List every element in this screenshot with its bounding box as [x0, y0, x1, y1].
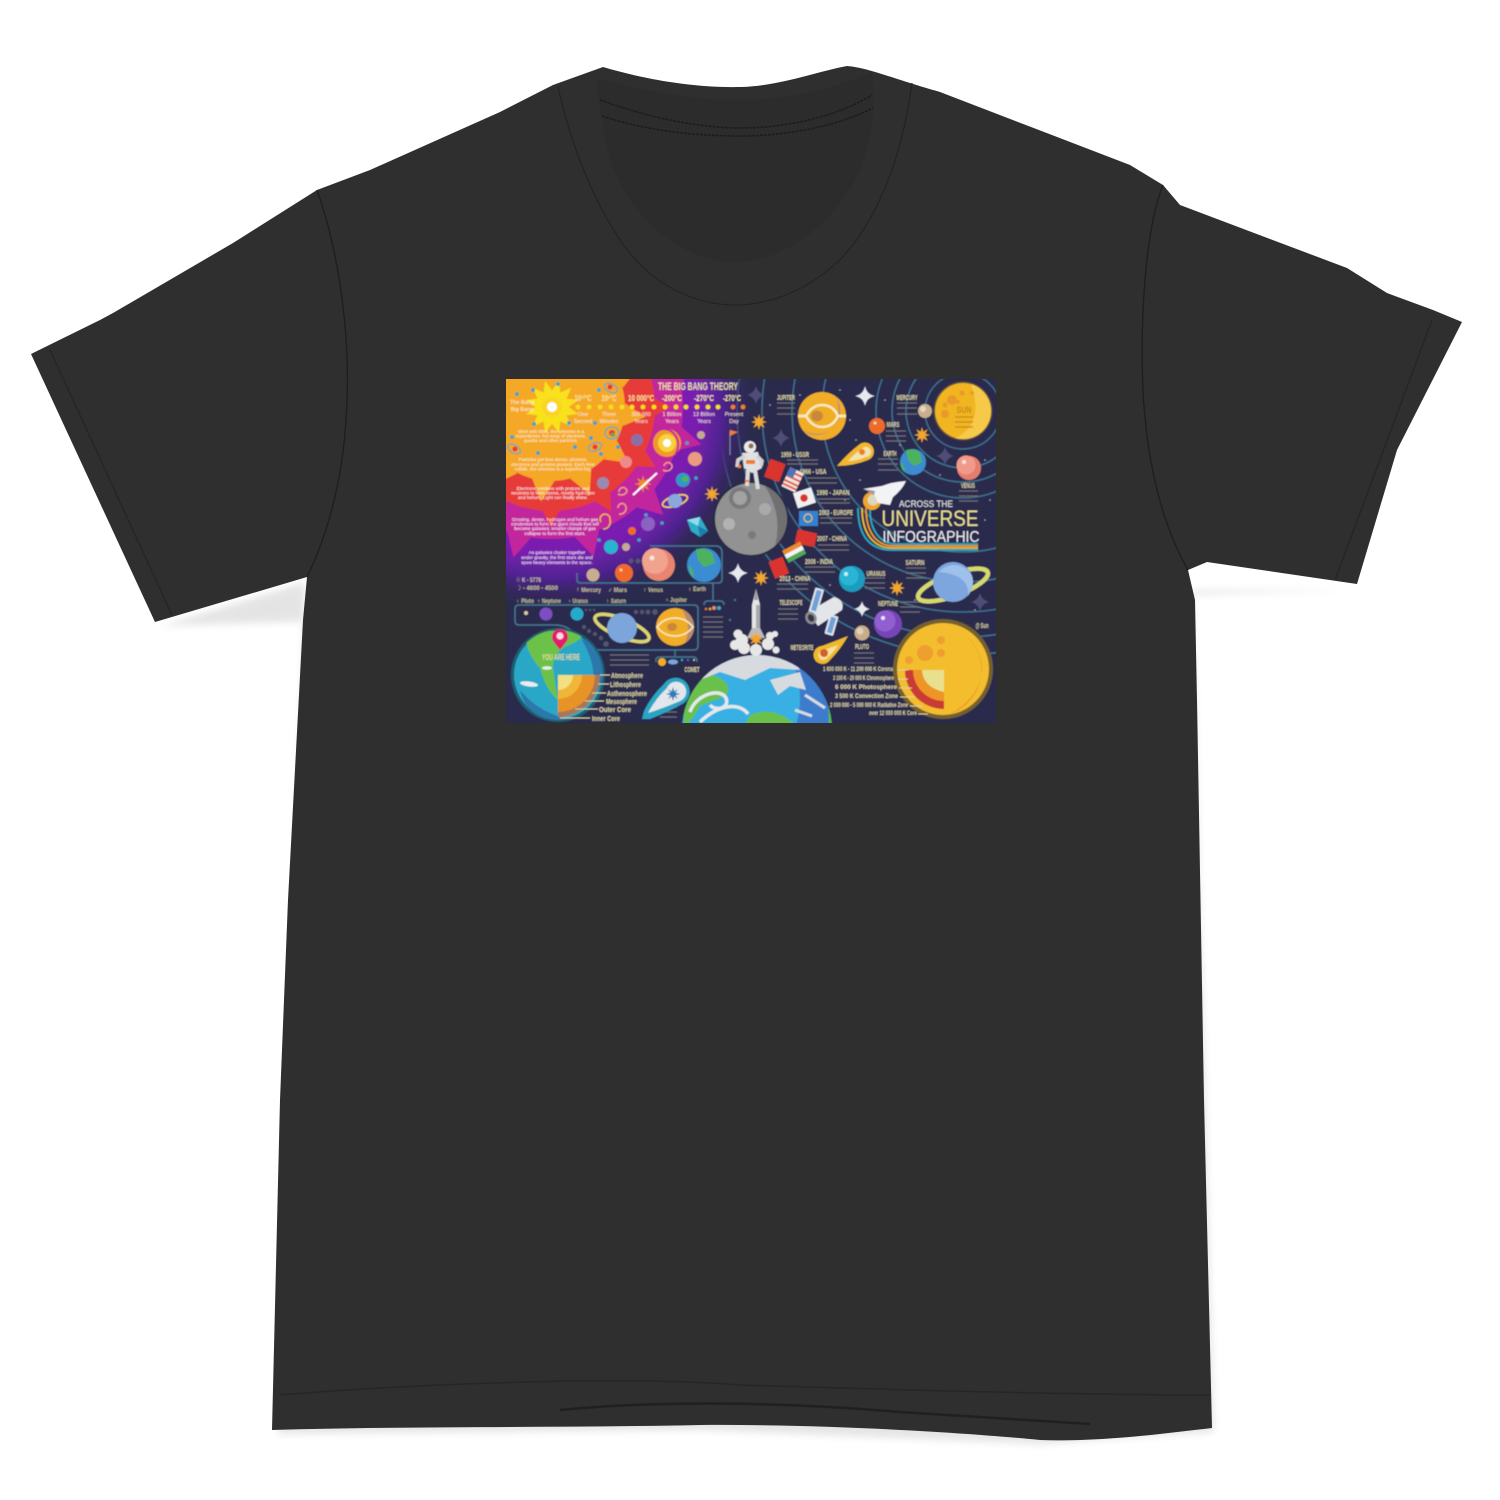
big bang temperature timeline: Years	[697, 419, 711, 425]
big bang temperature timeline: Years	[634, 419, 648, 425]
planet symbol legend: ♂ Mars	[608, 587, 627, 594]
supernova with jet	[633, 473, 657, 495]
ringed planet small	[661, 492, 689, 510]
space agency flags	[764, 459, 818, 579]
spiral galaxy	[653, 429, 681, 457]
sun layers temperature labels: 3 100 K - 20 000 K Chromosphere	[833, 676, 894, 682]
sun layers temperature labels: 6 000 K Photosphere	[835, 685, 898, 691]
earth layer labels	[592, 673, 647, 723]
title swoosh lines	[858, 508, 978, 550]
earth at bottom	[682, 654, 832, 723]
location pin	[552, 629, 568, 650]
printed infographic	[506, 379, 996, 723]
paragraph: galaxies cluster: As galaxies cluster together	[529, 550, 586, 555]
planet name labels	[777, 395, 988, 652]
jupiter	[798, 392, 846, 440]
big bang temperature timeline: One	[578, 412, 588, 418]
paragraph: first stars: Growing, dense, hydrogen and helium gas	[512, 517, 599, 522]
paragraph: hot soup: Most with titles, the universe is a	[518, 429, 585, 434]
title line: universe: UNIVERSE	[882, 506, 978, 531]
planet name labels: MARS	[886, 422, 900, 429]
paragraph: atoms form: neutrons to form atoms, mostly hydrogen	[511, 491, 595, 496]
particles in the early universe	[510, 382, 620, 456]
planet symbol legend: ♄ Saturn	[606, 598, 626, 605]
sun layers temperature labels: 2 000 000 - 5 000 000 K Radiative Zone	[830, 703, 908, 709]
paragraph: first stars: become galaxies; smaller clumps of gas	[514, 526, 596, 531]
big bang temperature timeline	[574, 394, 745, 425]
placeholder text lines	[610, 403, 978, 717]
sun layers wedge	[898, 670, 944, 714]
paragraph: protons and neutrons: Particles get less dense, photons,	[519, 457, 587, 462]
space shuttle	[863, 481, 906, 510]
big bang temperature timeline: Present	[725, 412, 744, 418]
agency timeline labels: 1959 - USSR	[781, 452, 809, 459]
paragraph: atoms form: Electrons combine with protons and	[517, 486, 590, 491]
saturn	[914, 562, 992, 608]
sun layers temperature labels: 1 600 000 K - 11 200 000 K Corona	[823, 667, 893, 673]
sun layers temperature labels	[823, 667, 917, 717]
planet symbol legend: ♁ Earth	[688, 586, 706, 593]
large sun cutaway	[893, 619, 993, 719]
big bang radial panel	[506, 379, 745, 601]
big bang temperature timeline: -270°C	[694, 394, 714, 403]
planet name labels: URANUS	[866, 571, 886, 578]
sun: SUN	[956, 405, 972, 415]
paragraph: galaxies cluster: under gravity, the first stars die and	[521, 555, 593, 560]
planet name labels: SATURN	[906, 560, 924, 567]
planet symbol legend: ♀ Venus	[643, 587, 663, 594]
big bang temperature timeline: 300 000	[631, 412, 651, 418]
small swirl galaxies	[600, 462, 672, 529]
agency timeline labels: 2008 - INDIA	[805, 559, 833, 566]
planet name labels: VENUS	[961, 483, 975, 490]
big bang temperature timeline: -270°C	[723, 394, 741, 403]
planet name labels: JUPITER	[777, 395, 795, 402]
big bang temperature timeline: Years	[665, 419, 679, 425]
big bang temperature timeline: -200°C	[662, 394, 682, 403]
paragraph: protons and neutrons: collide, the universe is a superhot fog.	[514, 467, 592, 472]
agency timeline labels	[780, 452, 853, 583]
paragraph: first stars: condenses to form the giant clouds that will	[511, 522, 599, 527]
uranus	[839, 566, 865, 592]
main title heading: the big bang theory: THE BIG BANG THEORY	[658, 381, 738, 393]
planet name labels: METEORITE	[790, 645, 814, 652]
planet symbol legend: ♅ Uranus	[568, 598, 588, 605]
paragraph: hot soup: superdense, hot soup of electrons,	[516, 434, 586, 439]
solar system orbit lines	[722, 379, 996, 655]
small bracket dots	[658, 606, 721, 666]
hubble telescope	[803, 587, 843, 636]
big bang temperature timeline: 1 Billion	[663, 412, 681, 418]
title line: across the: ACROSS THE	[899, 499, 953, 510]
big bang temperature timeline: 13 Billion	[693, 412, 715, 418]
starbursts	[704, 414, 930, 596]
astronaut with flag	[730, 430, 762, 489]
big bang temperature timeline: Day	[729, 419, 739, 425]
title: across the universe infographic	[882, 499, 980, 546]
four-point stars	[728, 386, 989, 617]
planet symbol legend: ♃ Jupiter	[665, 597, 687, 604]
neptune	[874, 610, 902, 638]
big bang label: The Bang	[510, 400, 534, 406]
agency timeline labels: 2003 - EUROPE	[819, 510, 853, 517]
mercury	[918, 404, 932, 418]
paragraph: protons and neutrons: electrons and protons present. Each time	[511, 462, 595, 467]
planet symbol legend: ☉ K - 5778	[516, 577, 541, 584]
agency timeline labels: 1966 - USA	[800, 469, 826, 476]
sun	[934, 382, 992, 440]
big bang label: Big Bang	[511, 407, 533, 413]
sun layers temperature labels: over 12 000 000 K Core	[869, 711, 917, 717]
agency timeline labels: 1990 - JAPAN	[816, 490, 850, 497]
early planets field	[597, 431, 705, 554]
planet symbol legend: ☿ Mercury	[576, 587, 601, 594]
planet symbol legend: ☽ - 4600 - 4500	[516, 585, 558, 592]
print background	[506, 379, 996, 723]
big bang temperature timeline: 10⁹°C	[602, 394, 617, 403]
paragraph: first stars: collapse to form the first stars.	[524, 531, 586, 536]
star dust	[724, 389, 991, 621]
earth planet	[900, 449, 926, 475]
earth cutaway: you are here	[511, 628, 605, 725]
planet frames connector lines	[515, 546, 724, 662]
earth layer labels: Asthenosphere	[607, 691, 647, 698]
sun layers temperature labels: 3 500 K Convection Zone	[835, 694, 899, 700]
big bang temperature timeline: Minutes	[600, 419, 619, 425]
comet label: COMET	[684, 667, 700, 674]
planet symbol legend	[516, 577, 706, 605]
big bang temperature timeline: Second	[574, 419, 592, 425]
moon	[713, 481, 789, 557]
planet symbol legend: ♇ Pluto	[516, 598, 534, 605]
crystal meteor	[687, 517, 708, 537]
inner planets row	[586, 548, 721, 582]
mars	[869, 418, 885, 434]
planet name labels: PLUTO	[855, 644, 869, 651]
planet name labels: NEPTUNE	[878, 601, 898, 608]
agency timeline labels: 2007 - CHINA	[817, 536, 847, 543]
big bang temperature timeline: 10¹²°C	[574, 394, 592, 403]
earth layers wedge	[558, 675, 610, 718]
planet symbol legend: ♆ Neptune	[537, 598, 561, 605]
paragraph: atoms form: and helium. Light can finally shine.	[518, 495, 588, 500]
rocket launching	[730, 589, 780, 656]
planet name labels: TELESCOPE	[780, 600, 803, 607]
pluto	[854, 626, 870, 640]
agency timeline labels: 2013 - CHINA	[780, 576, 810, 583]
paragraph: hot soup: quarks and other particles.	[524, 438, 578, 443]
paragraph: galaxies cluster: spew heavy elements in the space.	[521, 560, 593, 565]
planet name labels: EARTH	[884, 451, 896, 458]
earth layer labels: Mesosphere	[606, 699, 637, 706]
atom icons	[506, 381, 643, 489]
earth layer labels: Inner Core	[592, 716, 620, 723]
planet name labels: MERCURY	[896, 395, 918, 402]
comet large	[642, 678, 690, 719]
meteorite	[814, 636, 848, 664]
comet small	[837, 443, 874, 466]
title line: infographic: INFOGRAPHIC	[882, 529, 980, 546]
you are here label: YOU ARE HERE	[542, 653, 580, 662]
earth layer labels: Atmosphere	[611, 673, 643, 680]
earth layer labels: Lithosphere	[610, 682, 641, 689]
big bang temperature timeline: 10 000°C	[628, 394, 654, 403]
big bang temperature timeline: Three	[602, 412, 616, 418]
earth layer labels: Outer Core	[599, 707, 631, 714]
outer planets row	[524, 608, 694, 647]
venus	[956, 456, 981, 480]
planet name labels: @ Sun	[976, 623, 988, 630]
